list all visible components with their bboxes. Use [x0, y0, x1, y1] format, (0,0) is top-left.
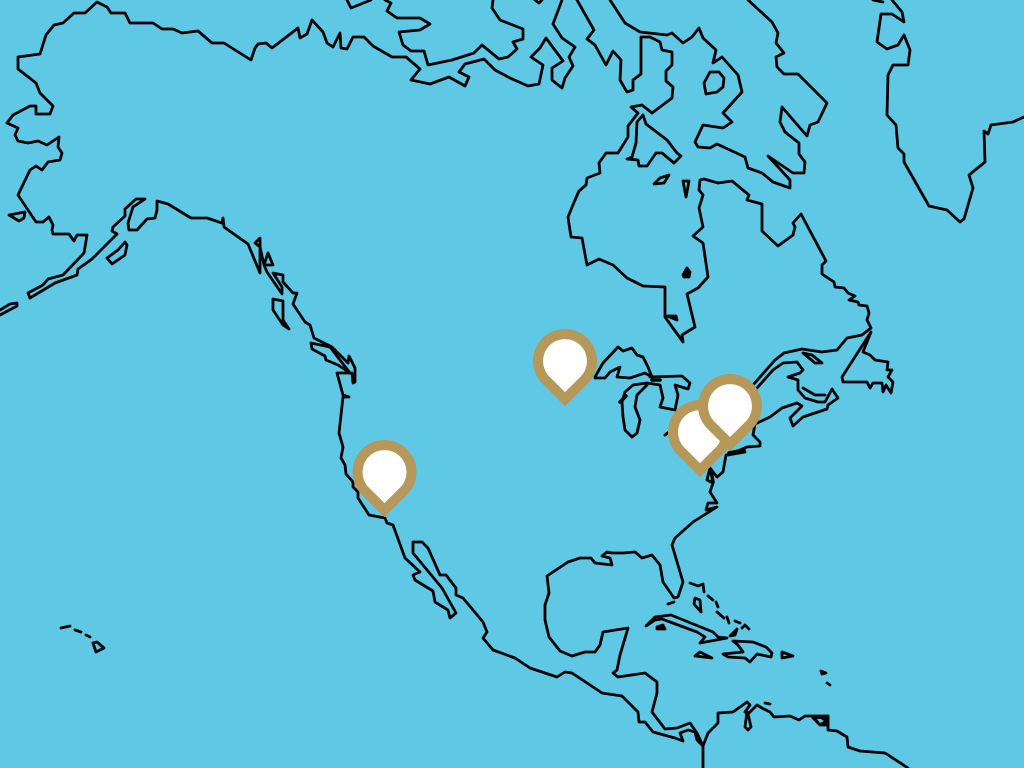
- Newfoundland and Gulf of St. Lawrence islands: [803, 332, 893, 395]
- Greenland: [873, 0, 1024, 222]
- pin: Mid-Atlantic: [668, 400, 732, 477]
- Alaska and Pacific islands: [0, 212, 350, 652]
- Great Lakes: [595, 347, 690, 437]
- pin: Northeast: [698, 374, 762, 451]
- Caribbean islands: [646, 583, 830, 730]
- Arctic islands: [347, 0, 827, 320]
- pin: Midwest: [533, 329, 597, 406]
- pin: California: [352, 440, 416, 517]
